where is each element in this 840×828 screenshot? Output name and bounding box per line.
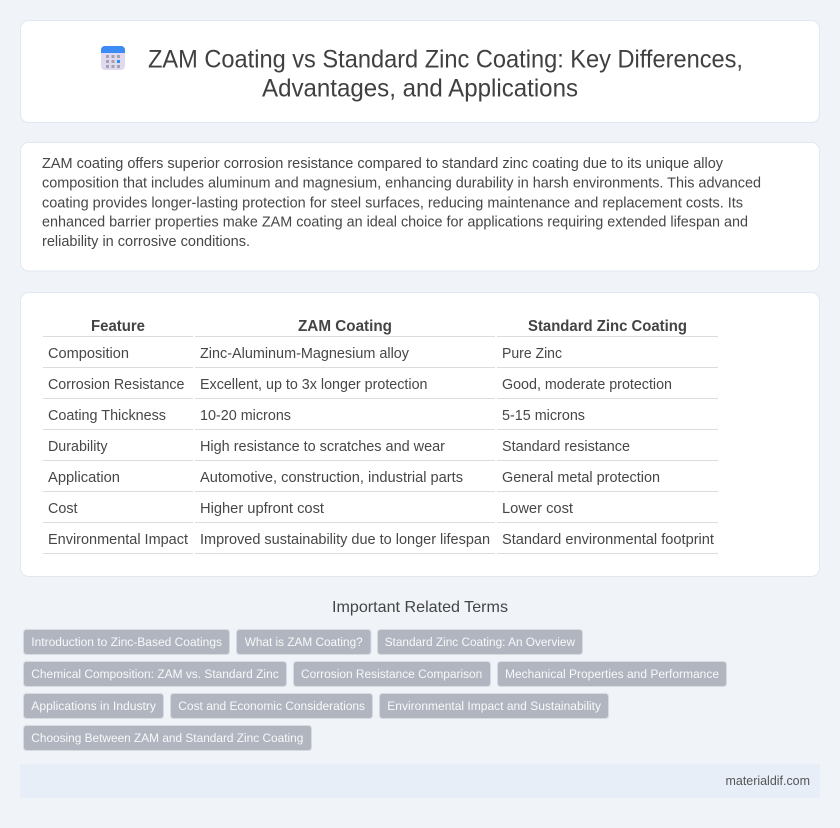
row: durability [43, 439, 718, 460]
tag [378, 630, 582, 654]
title [148, 46, 743, 102]
tag: Environmental Impact and Sustainability [387, 699, 602, 713]
row: application: General metal protection [502, 470, 660, 486]
row: cost: Higher upfront cost [200, 501, 324, 517]
heading: important related terms: Important Related Terms [332, 599, 508, 616]
row: coating thickness: Coating Thickness [48, 408, 166, 424]
panel: summary paragraph [20, 142, 820, 271]
row: environmental impact [43, 532, 718, 554]
tag: Applications in Industry [31, 699, 157, 713]
table header row: ZAM Coating [298, 318, 392, 335]
row: durability: Standard resistance [502, 439, 630, 455]
row: application: Automotive, construction, industrial parts [200, 470, 463, 486]
row: coating thickness [43, 408, 718, 430]
row: application [43, 470, 718, 492]
title: ZAM Coating vs Standard Zinc Coating: Key Differences, [148, 46, 743, 74]
row: environmental impact: Standard environmental footprint [502, 532, 714, 548]
tag [24, 630, 230, 654]
tag [498, 662, 726, 686]
row: corrosion resistance: Good, moderate protection [502, 377, 672, 393]
panel: summary paragraph: enhanced barrier properties make ZAM coating an ideal choice for applications requiring extended lifespan and [42, 215, 748, 231]
panel: title header [20, 20, 820, 122]
tag [24, 662, 286, 686]
tag: Corrosion Resistance Comparison [301, 667, 482, 681]
row: corrosion resistance [43, 377, 718, 398]
row: durability: High resistance to scratches and wear [200, 439, 445, 455]
related term tags [24, 630, 726, 750]
table header row [43, 318, 718, 336]
footer: materialdif.com [726, 773, 810, 788]
row: composition: Zinc-Aluminum-Magnesium alloy [200, 346, 410, 362]
table header row: Standard Zinc Coating [528, 318, 687, 335]
row: environmental impact: Improved sustainability due to longer lifespan [200, 532, 490, 548]
row: coating thickness: 10-20 microns [200, 408, 291, 424]
tag: Choosing Between ZAM and Standard Zinc Coating [31, 731, 303, 745]
tag [24, 726, 312, 750]
panel: summary paragraph: reliability in corrosive conditions. [42, 234, 250, 250]
tag: Introduction to Zinc-Based Coatings [31, 635, 222, 649]
icon: calendar [101, 46, 125, 70]
row: environmental impact: Environmental Impact [48, 532, 188, 548]
panel: summary paragraph: coating provides longer-lasting protection for steel surfaces, reducing maintenance and replacement costs. Its [42, 195, 743, 211]
row: corrosion resistance: Corrosion Resistance [48, 377, 184, 393]
row: cost: Cost [48, 501, 78, 517]
tag: Chemical Composition: ZAM vs. Standard Zinc [31, 667, 279, 681]
tag: Mechanical Properties and Performance [505, 667, 719, 681]
row: composition: Pure Zinc [502, 346, 562, 362]
panel: summary paragraph: ZAM coating offers superior corrosion resistance compared to standard zinc coating due to its unique alloy [42, 156, 724, 172]
tag [24, 694, 164, 718]
footer [20, 764, 820, 798]
tag [170, 694, 372, 718]
panel: summary paragraph: composition that includes aluminum and magnesium, enhancing durability in harsh environments. This advanced [42, 176, 761, 192]
title: Advantages, and Applications [262, 74, 578, 102]
tag [236, 630, 371, 654]
row: composition: Composition [48, 346, 129, 362]
row: application: Application [48, 470, 120, 486]
row: corrosion resistance: Excellent, up to 3x longer protection [200, 377, 428, 393]
row: cost: Lower cost [502, 501, 573, 517]
table header row: Feature [91, 318, 145, 335]
tag: Standard Zinc Coating: An Overview [385, 635, 575, 649]
tag: What is ZAM Coating? [245, 635, 363, 649]
row: coating thickness: 5-15 microns [502, 408, 585, 424]
tag: Cost and Economic Considerations [178, 699, 365, 713]
row: cost [43, 501, 718, 522]
row: durability: Durability [48, 439, 108, 455]
panel: comparison table [20, 292, 820, 576]
tag [294, 662, 490, 686]
row: composition [43, 346, 718, 368]
tag [380, 694, 608, 718]
